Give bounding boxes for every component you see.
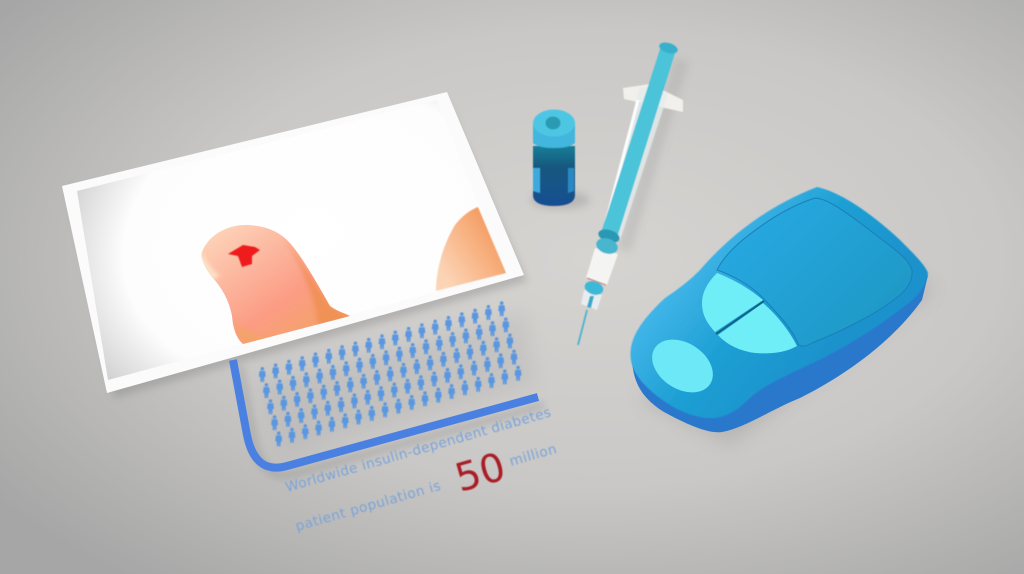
- flange: [623, 84, 683, 112]
- body top: [630, 187, 928, 418]
- needle hub: [581, 290, 602, 310]
- second finger: [436, 207, 506, 291]
- plunger rod: [601, 46, 676, 238]
- finger lower shading: [232, 321, 269, 344]
- buttons: [702, 273, 763, 332]
- body bottom edge: [632, 275, 928, 432]
- fingernail edge: [202, 254, 220, 280]
- syringe: [578, 40, 683, 345]
- syringe lower barrel: [586, 248, 618, 285]
- glucose meter: [630, 187, 935, 445]
- people chart shadow: [258, 312, 536, 452]
- caption text: million: [508, 441, 559, 470]
- photo card: fingertip with blood drop: [62, 92, 527, 398]
- needle: [578, 310, 587, 345]
- caption text: [284, 404, 559, 535]
- blood drop: [228, 245, 260, 267]
- clear barrel: [605, 86, 668, 240]
- figure: 50 million: 50: [450, 445, 510, 502]
- vial: [530, 110, 590, 209]
- blue bracket line: [233, 360, 544, 475]
- caption text: patient population is: [294, 478, 443, 535]
- screen: [717, 198, 912, 346]
- people chart: 19 columns by 5 rows: [259, 301, 522, 446]
- finger side shading: [288, 244, 350, 325]
- caption text: Worldwide insulin-dependent diabetes: [284, 404, 553, 496]
- finger: [202, 225, 350, 344]
